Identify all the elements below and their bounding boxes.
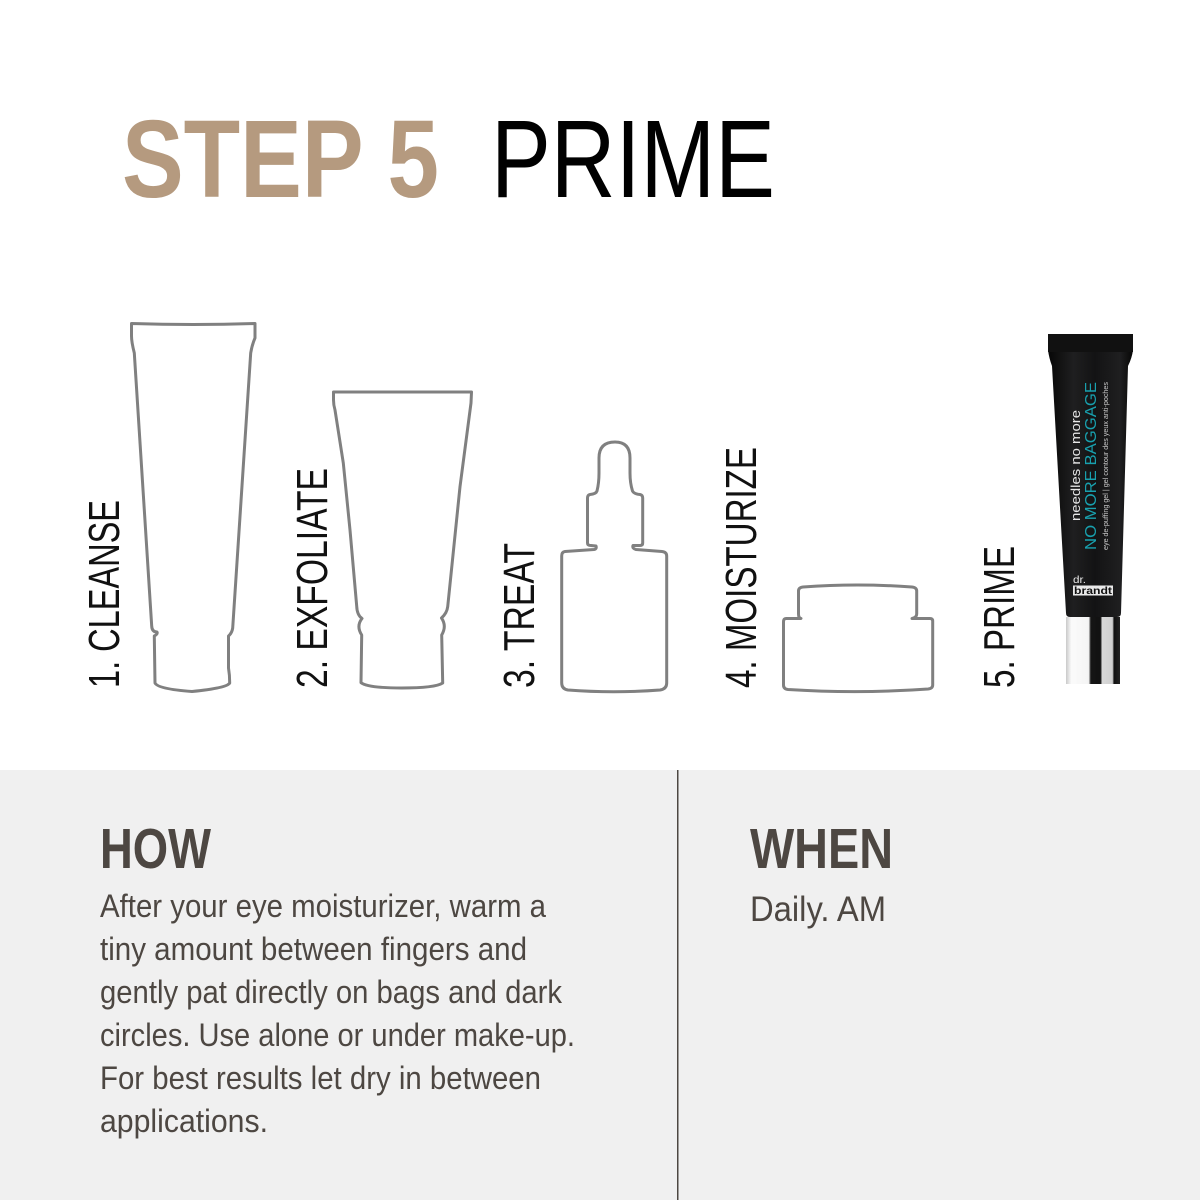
icon: cream jar [784,585,933,692]
label: 3. treat: 3. TREAT [495,543,544,688]
tube cap [1066,617,1120,684]
brand line: needles no more [1068,410,1083,521]
heading: how: HOW [100,817,211,881]
product descriptor: eye de-puffing gel | gel contour des yeux anti-poches [1103,381,1110,550]
panel: when [750,817,893,929]
how text [100,888,575,1139]
how text: gently pat directly on bags and dark [100,974,563,1010]
step 5: prime [975,334,1133,688]
heading: when: WHEN [750,817,893,881]
label: 4. moisturize: 4. MOISTURIZE [717,447,766,688]
product: eye gel tube [1048,334,1133,684]
title: step name: PRIME [491,98,775,221]
icon: exfoliator tube [334,392,472,688]
how text: After your eye moisturizer, warm a [100,888,547,924]
step 1: cleanse [80,324,255,692]
step 2: exfoliate [288,392,472,688]
how text: circles. Use alone or under make-up. [100,1017,575,1053]
icon: dropper bottle [562,442,667,692]
how text: tiny amount between fingers and [100,931,527,967]
logo: brandt [1074,585,1113,597]
logo [1073,574,1113,597]
title: step number: STEP 5 [122,98,439,221]
logo: dr. [1073,574,1086,586]
tube text [1068,381,1113,597]
how text: applications. [100,1103,268,1139]
product name: NO MORE BAGGAGE [1083,382,1100,550]
label: 5. prime: 5. PRIME [975,546,1024,688]
panel: how [100,817,575,1139]
panel: how and when [0,770,1200,1200]
when text: Daily. AM [750,890,886,929]
title [122,98,775,221]
how text: For best results let dry in between [100,1060,541,1096]
label: 1. cleanse: 1. CLEANSE [80,500,129,688]
tube body [1048,350,1133,617]
step 4: moisturize [717,447,933,692]
icon: cleanser tube [132,324,255,692]
step 3: treat [495,442,667,692]
label: 2. exfoliate: 2. EXFOLIATE [288,468,337,688]
tube crimp [1048,334,1133,352]
